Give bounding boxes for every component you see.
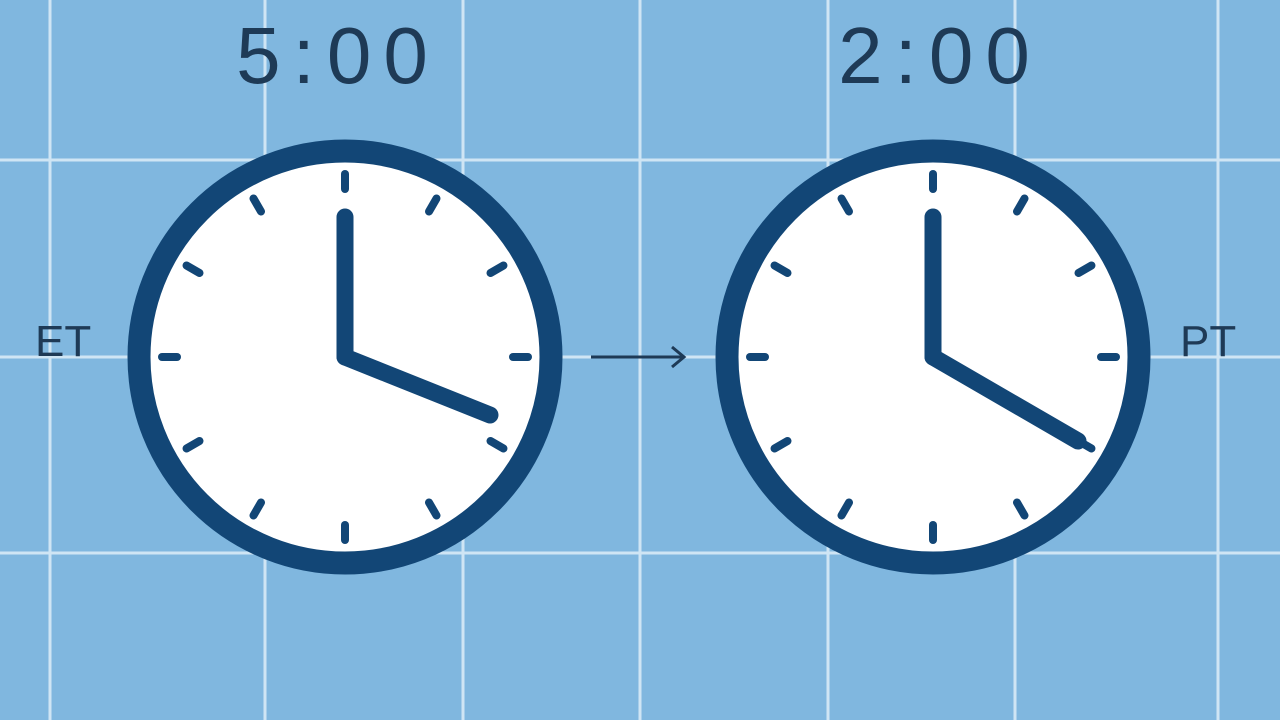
clock: PT	[727, 151, 1139, 563]
heading: 2:00: 2:00	[838, 11, 1042, 100]
clock: ET	[139, 151, 551, 563]
heading: 5:00: 5:00	[236, 11, 440, 100]
label: PT: PT	[1180, 317, 1236, 366]
label: ET: ET	[35, 317, 91, 366]
arrow	[591, 347, 684, 367]
